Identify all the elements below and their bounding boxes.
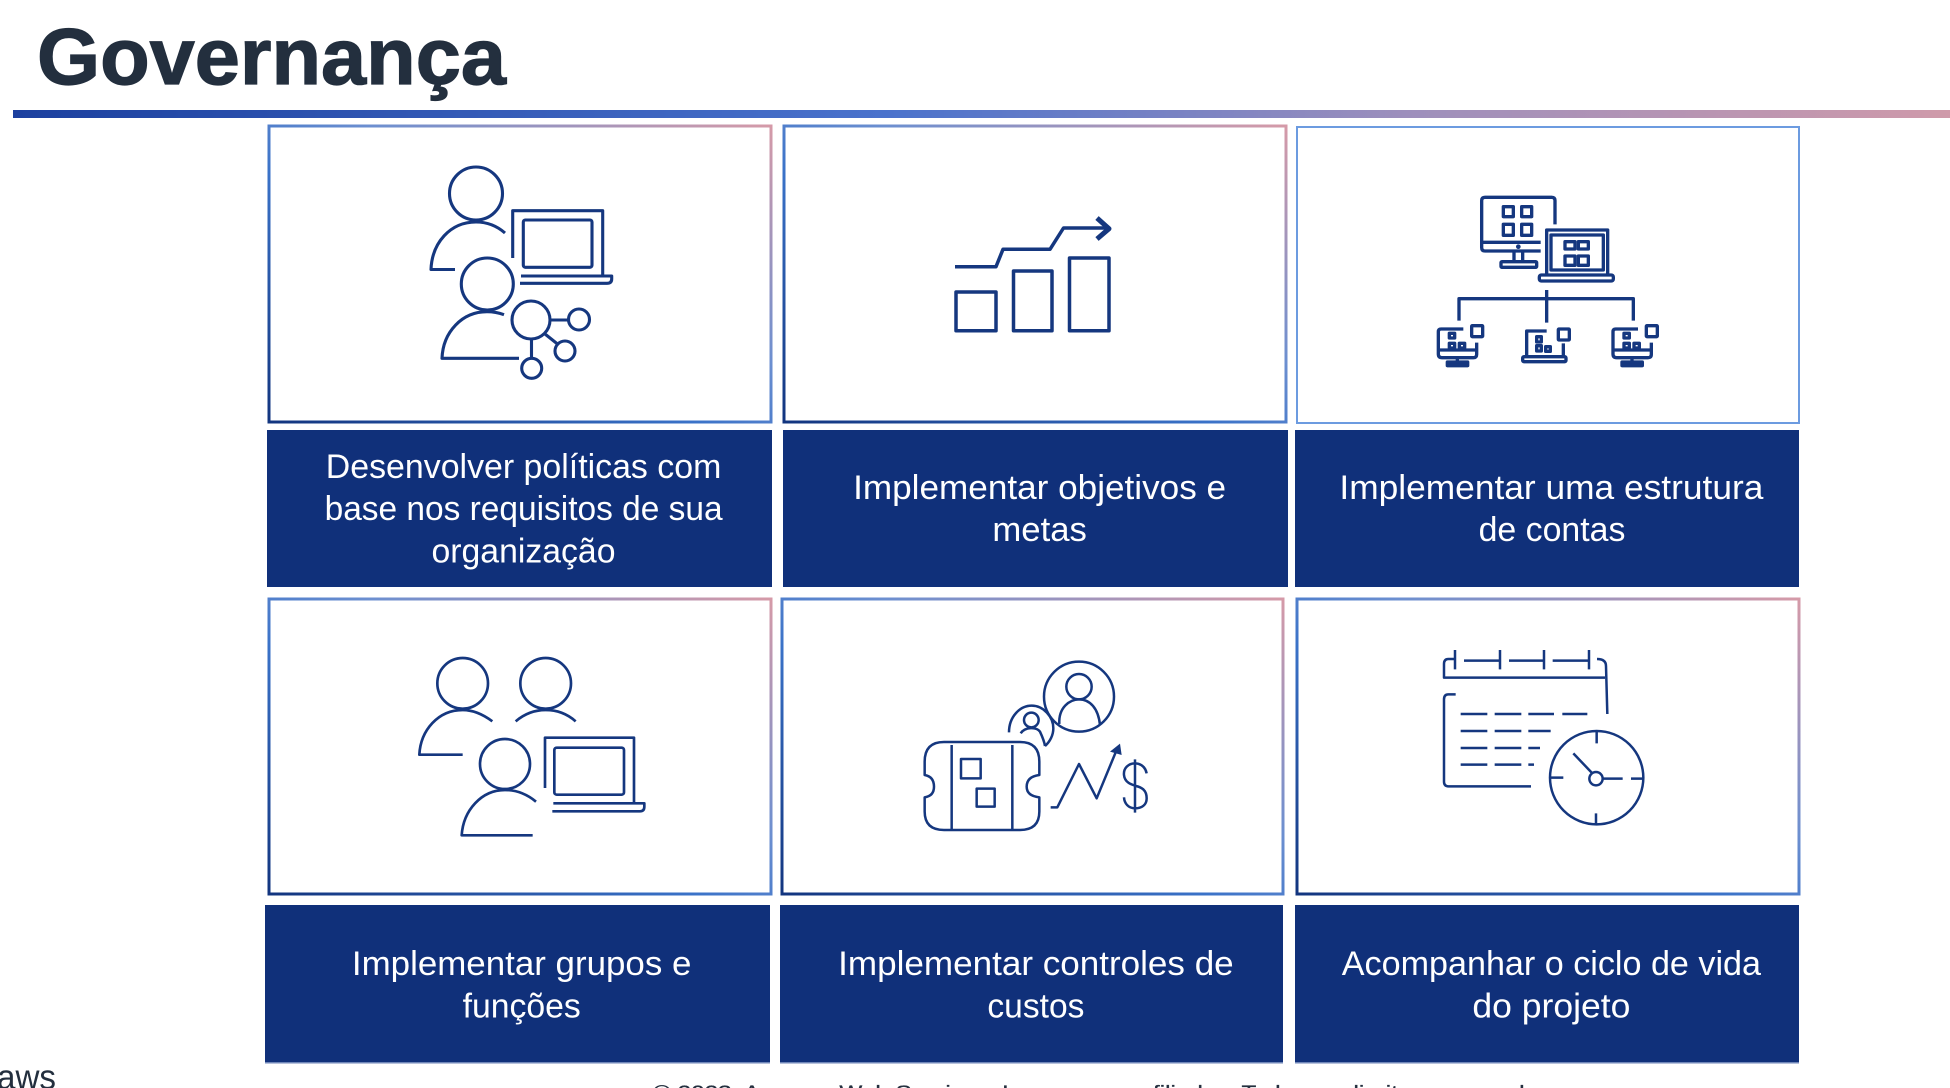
caption band 1: Desenvolver políticas com: [326, 448, 721, 486]
card frame 5: [782, 599, 1283, 894]
panel: grupos e funções: [265, 599, 771, 1064]
card frame 4: [269, 599, 771, 894]
caption band 5: Implementar controles de: [838, 945, 1234, 983]
icon: three people with laptop: [419, 658, 644, 835]
caption band 6: Acompanhar o ciclo de vida: [1342, 945, 1761, 983]
caption band 6: [1295, 905, 1799, 1064]
caption band 6: do projeto: [1472, 988, 1630, 1026]
caption band 3: Implementar uma estrutura: [1339, 469, 1763, 507]
card frame 6: [1297, 599, 1799, 894]
caption band 2: Implementar objetivos e: [853, 469, 1226, 507]
card frame 3: [1297, 127, 1799, 423]
panel: controles de custos: [780, 599, 1283, 1064]
caption band 1: [267, 430, 772, 587]
caption band 4: funções: [463, 988, 581, 1026]
card frame 2: [784, 126, 1286, 422]
caption band 4: Implementar grupos e: [352, 945, 691, 983]
title: Governança: [37, 12, 507, 101]
panel: desenvolver políticas: [267, 126, 772, 587]
card frame 1: [269, 126, 771, 422]
caption band 4: [265, 905, 770, 1064]
panel: ciclo de vida do projeto: [1295, 599, 1799, 1064]
icon: calendar and clock: [1444, 650, 1643, 824]
panel: objetivos e metas: [783, 126, 1288, 587]
icon: bar chart with rising arrow: [955, 218, 1109, 331]
caption band 3: [1295, 430, 1799, 587]
icon: budget ticket, users and dollar trend: [925, 662, 1147, 830]
header gradient rule: [13, 110, 1950, 118]
icon: account structure tree: [1438, 197, 1657, 366]
caption band 3: de contas: [1479, 511, 1625, 549]
panel: estrutura de contas: [1295, 127, 1799, 587]
caption band 2: [783, 430, 1288, 587]
caption band 2: metas: [992, 511, 1087, 549]
caption band 5: [780, 905, 1283, 1064]
caption band 1: base nos requisitos de sua: [325, 490, 723, 528]
caption band 1: organização: [432, 532, 616, 570]
caption band 5: custos: [987, 988, 1084, 1026]
icon: people, laptop and network: [431, 167, 612, 378]
